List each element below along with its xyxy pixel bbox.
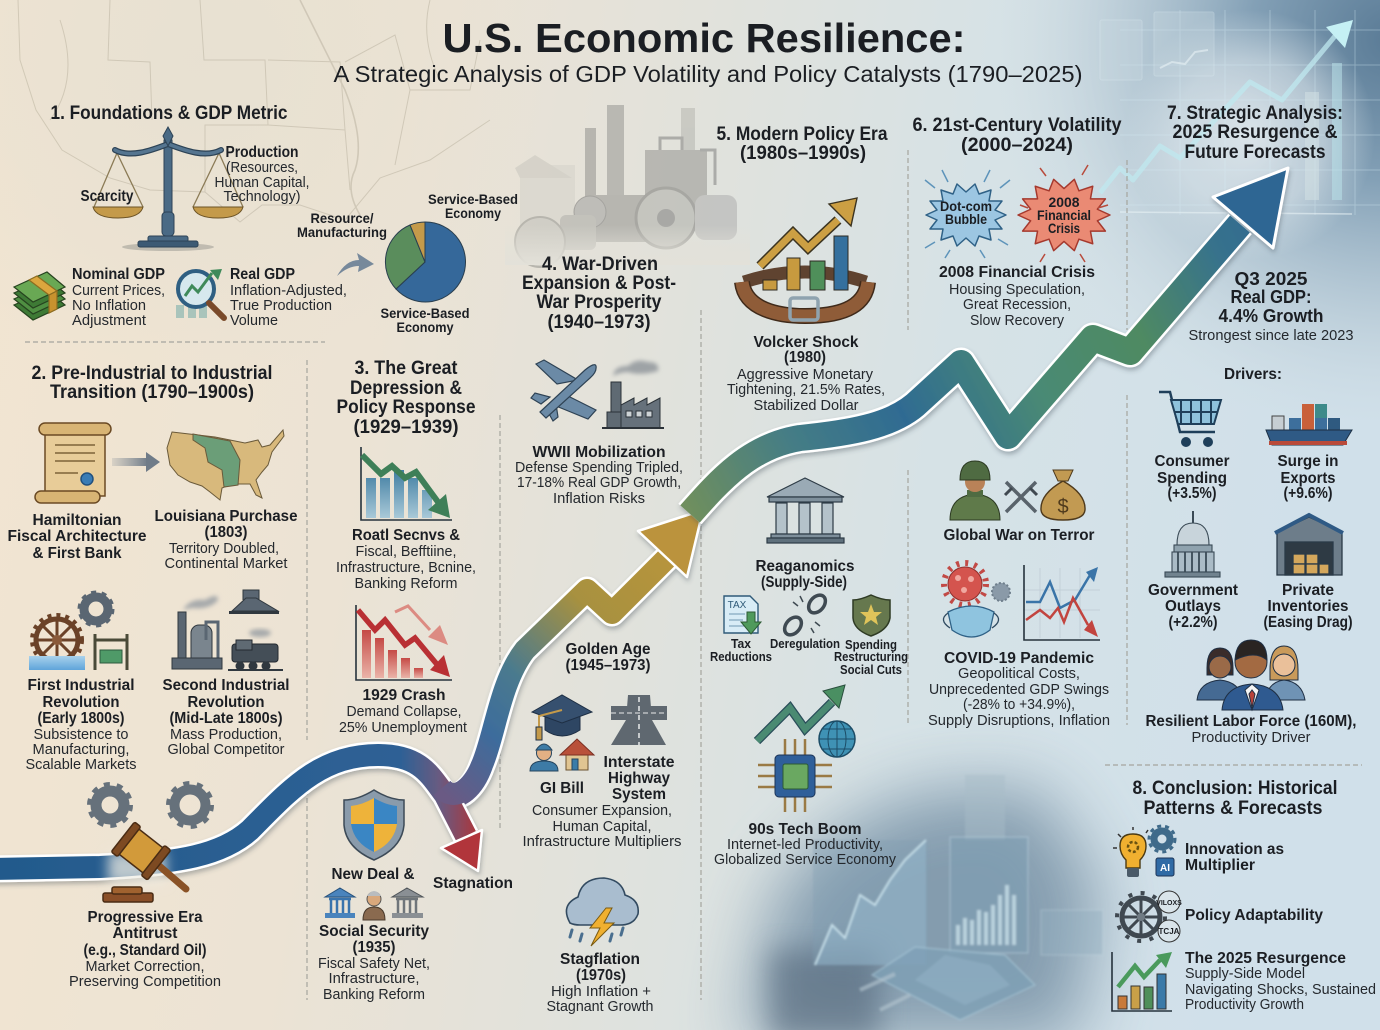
icon: gear right [168,784,212,826]
label: government outlays: (+2.2%) [1168,614,1218,631]
heading [1132,778,1338,819]
text: golden age effects [522,802,682,850]
label: consumer spending [1154,453,1230,502]
label: resilient labor force: Resilient Labor Force (160M), [1146,713,1356,730]
label: production [214,144,310,205]
icon: ship wheel [1117,891,1182,942]
icon: dot-com bubble burst: Bubble [945,212,987,227]
heading: 8. Conclusion: Historical [1132,778,1338,799]
icon: soldier, rifles and money bag: $ [1057,496,1069,518]
panel: 3. the great depression and policy response [318,358,513,1003]
label: interstate highway system: Highway [608,770,670,787]
icon: belt with rising bars [742,198,868,320]
heading: Depression & [350,378,462,399]
label: Reaganomics: Reaganomics [756,558,855,575]
text: golden age effects: Infrastructure Multipliers [522,833,682,850]
label: second industrial revolution: Global Competitor [168,741,285,758]
icon: factory and railroad [172,590,283,671]
heading: 2025 Resurgence & [1172,122,1338,143]
icon: scroll [35,423,111,503]
label: progressive era antitrust: Preserving Competition [69,973,221,990]
label: the 2025 resurgence: Productivity Growth [1185,996,1304,1013]
chart: volatility lines [1023,565,1100,640]
heading [336,358,476,438]
icon: dot-com bubble burst [925,170,1010,258]
chart: economy share pie [385,222,466,302]
label: 2008 financial crisis: Housing Speculation, [949,281,1085,298]
icon: tax document: TAX [728,600,747,611]
icon: magnifier on chart [176,269,224,318]
label: real GDP [230,266,347,329]
label: first industrial revolution: First Industrial [28,677,134,694]
label: second industrial revolution: (Mid-Late 1800s) [170,710,282,727]
heading: 2. Pre-Industrial to Industrial [32,363,272,384]
label: COVID-19 pandemic: COVID-19 Pandemic [944,650,1094,667]
label: stagflation [546,951,654,1015]
label: social security: Fiscal Safety Net, [318,955,430,972]
heading: (1929–1939) [354,417,458,438]
label: Volcker shock: (1980) [784,349,826,366]
labels: reaganomics policies [710,637,908,677]
label: government outlays: Outlays [1165,598,1221,615]
heading: Expansion & Post- [522,273,676,294]
arrow: to pie [337,253,374,276]
label: second industrial revolution: Revolution [188,694,264,711]
label: the 2025 resurgence: Supply-Side Model [1185,965,1305,982]
panel: 2. pre-industrial to industrial transition [8,363,298,990]
icon: military plane [531,360,596,421]
label: production: Human Capital, [214,174,310,191]
callout: Q3 2025 real GDP: Strongest since late 2023 [1188,327,1354,344]
label: social security: Social Security [319,923,429,940]
labels: reaganomics policies: Deregulation [770,637,840,651]
heading: Transition (1790–1900s) [50,382,254,403]
heading: 3. The Great [354,358,458,379]
label: private inventories: Private [1282,582,1334,599]
icon: gear left [90,784,130,826]
label: 2008 financial crisis: Great Recession, [963,296,1071,313]
panel: 5. modern policy era [710,124,908,868]
background: faint US map [18,0,490,222]
label: COVID-19 pandemic: Geopolitical Costs, [958,665,1080,682]
label: Louisiana Purchase [154,508,298,572]
icon: storm cloud [566,878,638,946]
labels: reaganomics policies: Social Cuts [840,663,902,677]
label: consumer spending: (+3.5%) [1168,485,1216,502]
labels: reaganomics policies: Spending [845,638,897,652]
label: production: Production [226,144,298,161]
icon: GI and house [530,739,594,771]
labels: reaganomics policies: Reductions [710,650,772,664]
heading [522,254,676,333]
label: surge in exports: Exports [1280,470,1336,487]
icon: capitol [1165,511,1220,577]
label: interstate highway system: System [612,786,666,803]
label: progressive era antitrust: Antitrust [112,925,178,942]
label: 1929 crash [339,687,468,736]
label: resource and manufacturing [297,210,387,240]
label: 90s tech boom [714,821,896,868]
heading: Policy Response [336,397,476,418]
heading: Patterns & Forecasts [1144,798,1322,819]
background: top-right dashboard [1100,10,1380,215]
label: government outlays: Government [1148,582,1239,599]
label: first industrial revolution: Scalable Markets [26,756,136,773]
panel: 8. conclusion [1112,778,1376,1013]
label: WWII mobilization: Inflation Risks [553,490,645,507]
label: Hamiltonian fiscal architecture: & First Bank [32,545,122,562]
arrow: to Louisiana Purchase [112,452,160,472]
text: golden age effects: Human Capital, [552,818,652,835]
icon: 2008 financial crisis burst: 2008 [1048,195,1080,210]
label: innovation as multiplier: Multiplier [1185,857,1255,874]
label: real GDP: Inflation-Adjusted, [230,282,347,299]
label: real GDP: True Production [230,297,332,314]
heading [716,124,888,164]
label: Hamiltonian fiscal architecture: Hamiltonian [32,512,122,529]
label: first industrial revolution [26,677,136,773]
label: 2008 financial crisis: Slow Recovery [970,312,1064,329]
label: WWII mobilization: Defense Spending Tripled, [515,459,683,476]
callout: Q3 2025 real GDP: Q3 2025 [1234,268,1308,289]
heading: 7. Strategic Analysis: [1167,103,1343,124]
label: second industrial revolution: Second Industrial [162,677,290,694]
icon: innovation bulb: AI [1160,863,1170,874]
icon: water wheel, gear and loom [29,592,127,670]
label: Louisiana Purchase: Continental Market [164,555,288,572]
icon: resurgence chart [1112,952,1172,1011]
label: progressive era antitrust [69,909,221,990]
label: Volcker shock [727,334,885,414]
label: stagnation: Stagnation [433,875,513,892]
growth ribbon: modern era to 2025 [690,168,1288,514]
label: new deal: New Deal & [332,866,415,883]
label: surge in exports [1278,453,1338,502]
heading: 6. 21st-Century Volatility [912,115,1122,136]
label: progressive era antitrust: (e.g., Standard Oil) [84,942,206,959]
label: global war on terror: Global War on Terror [944,527,1094,544]
panel: 7. strategic analysis [1146,103,1356,746]
label: service-based economy bottom [380,305,470,335]
heading: 4. War-Driven [542,254,658,275]
icon: workers [1197,640,1305,710]
label: WWII mobilization [515,444,683,507]
label: Louisiana Purchase: Territory Doubled, [169,540,279,557]
label: 1929 crash: 1929 Crash [362,687,446,704]
label: stagflation: (1970s) [576,967,626,984]
title: U.S. Economic Resilience: [442,15,966,61]
chart: 1929 crash [356,605,452,680]
label: social security: (1935) [352,939,396,956]
icon: shield [344,790,404,860]
label: social security: Banking Reform [323,986,425,1003]
growth ribbon: post-war rise with golden arrow [447,510,703,796]
label: interstate highway system [604,754,675,803]
label: surge in exports: Surge in [1278,453,1338,470]
label: policy adaptability: Policy Adaptability [1185,907,1323,924]
chart: green decline [361,447,452,520]
label: GI Bill: GI Bill [540,780,584,797]
label: second industrial revolution [162,677,290,758]
icon: factory with smoke [602,361,664,429]
icon: shopping cart [1159,392,1221,446]
panel: 6. 21st-century volatility [912,115,1122,729]
label: progressive era antitrust: Progressive Era [88,909,203,926]
label: fiscal measures: Infrastructure, Bcnine, [336,559,476,576]
label: stagflation: Stagflation [560,951,640,968]
label: innovation as multiplier [1185,841,1284,874]
label: first industrial revolution: Revolution [42,694,120,711]
label: private inventories: (Easing Drag) [1264,614,1352,631]
label: 90s tech boom: Internet-led Productivity, [727,836,883,853]
label: consumer spending: Consumer [1154,453,1230,470]
icon: 2008 financial crisis burst: Crisis [1048,221,1080,236]
label: resilient labor force: Productivity Driver [1192,729,1310,746]
heading: 1. Foundations & GDP Metric [50,103,288,124]
label: real GDP: Real GDP [230,266,295,283]
subtitle: A Strategic Analysis of GDP Volatility and Policy Catalysts (1790–2025) [334,61,1082,87]
label: golden age [566,641,651,674]
label: scarcity: Scarcity [80,188,134,205]
label: golden age: (1945–1973) [566,657,650,674]
heading [32,363,272,403]
label: resource and manufacturing: Manufacturing [297,224,387,240]
label: nominal GDP: Nominal GDP [72,266,165,283]
icon: small shield [853,595,890,636]
label: surge in exports: (+9.6%) [1284,485,1332,502]
label: first industrial revolution: Subsistence to [34,726,128,743]
icon: cash stack [14,272,65,320]
callout: Q3 2025 real GDP: 4.4% Growth [1218,305,1324,326]
label: nominal GDP: No Inflation [72,297,146,314]
label: 2008 financial crisis: 2008 Financial Crisis [939,264,1095,281]
label: government outlays [1148,582,1239,631]
heading: War Prosperity [536,292,662,313]
label: service-based economy bottom: Economy [396,319,454,335]
label: 2008 financial crisis [939,264,1095,329]
heading: Future Forecasts [1184,142,1326,163]
label: real GDP: Volume [230,312,278,329]
icon: capitol bank [767,478,844,543]
label: social security [318,923,430,1003]
label: production: (Resources, [226,159,298,176]
heading: (1980s–1990s) [740,143,866,164]
label: WWII mobilization: WWII Mobilization [532,444,666,461]
label: 90s tech boom: Globalized Service Economy [714,851,896,868]
label: Volcker shock: Stabilized Dollar [754,397,858,414]
label: Reaganomics [756,558,855,591]
section dividers [25,150,1362,1000]
label: service-based economy top [428,191,518,221]
icon: 2008 financial crisis burst [1018,165,1110,262]
text: golden age effects: Consumer Expansion, [532,802,672,819]
label: stagflation: High Inflation + [551,983,651,1000]
label: resilient labor force [1146,713,1356,746]
label: golden age: Golden Age [566,641,651,658]
icon: ship wheel: VILOXS [1156,900,1182,907]
ribbon junction [442,765,482,794]
label: COVID-19 pandemic: (-28% to +34.9%), [963,696,1075,713]
label: 1929 crash: 25% Unemployment [339,719,468,736]
labels: reaganomics policies: Tax [731,637,751,651]
label: drivers: Drivers: [1224,366,1282,383]
growth ribbon: early industrial to stagnation [0,755,482,871]
label: service-based economy bottom: Service-Based [380,305,470,321]
panel: 4. war-driven expansion and post-war prosperity [515,254,683,1015]
heading: (1940–1973) [548,312,650,333]
heading [1167,103,1343,163]
label: nominal GDP [72,266,165,329]
ribbon highlight under gavel [108,852,166,884]
label: fiscal measures: Roatl Secnvs & [352,527,460,544]
callout: Q3 2025 real GDP: Real GDP: [1230,286,1312,307]
label: fiscal measures [336,527,476,592]
icon: ship wheel: TCJA [1159,927,1180,936]
icon: tax document [724,596,761,634]
label: 90s tech boom: 90s Tech Boom [748,821,862,838]
label: service-based economy top: Service-Based [428,191,518,207]
icon: dot-com bubble burst: Dot-com [940,199,992,214]
icon: balance scale [93,127,243,251]
label: 1929 crash: Demand Collapse, [346,703,462,720]
label: the 2025 resurgence [1185,950,1376,1013]
label: interstate highway system: Interstate [604,754,675,771]
icon: 2008 financial crisis burst: Financial [1037,208,1091,223]
label: resource and manufacturing: Resource/ [310,210,374,226]
label: social security: Infrastructure, [328,970,420,987]
label: service-based economy top: Economy [445,205,501,221]
label: Louisiana Purchase: Louisiana Purchase [154,508,298,525]
icon: container ship [1266,404,1352,445]
label: nominal GDP: Adjustment [72,312,147,329]
label: COVID-19 pandemic: Unprecedented GDP Swings [929,681,1109,698]
label: private inventories [1264,582,1352,631]
icon: gavel [103,822,186,902]
heading [912,115,1122,156]
icon: warehouse [1275,515,1343,575]
label: private inventories: Inventories [1268,598,1349,615]
label: Volcker shock: Tightening, 21.5% Rates, [727,381,885,398]
icon: innovation bulb [1113,826,1175,877]
label: the 2025 resurgence: Navigating Shocks, Sustained [1185,981,1376,998]
background: bottom tech workstation [745,775,1103,1030]
label: consumer spending: Spending [1157,470,1227,487]
label: progressive era antitrust: Market Correction, [86,958,204,975]
heading: (2000–2024) [961,135,1073,156]
label: innovation as multiplier: Innovation as [1185,841,1284,858]
label: stagflation: Stagnant Growth [546,998,654,1015]
background: steam engine sketch [505,105,750,267]
label: first industrial revolution: (Early 1800s) [38,710,124,727]
label: the 2025 resurgence: The 2025 Resurgence [1185,950,1346,967]
icon: broken chain [781,592,829,638]
icon: tech chip, globe and growth arrow [757,685,855,812]
label: Hamiltonian fiscal architecture [8,512,147,562]
label: nominal GDP: Current Prices, [72,282,165,299]
icon: US map with Louisiana Purchase [167,430,284,500]
icon: graduation cap [532,695,592,740]
label: Hamiltonian fiscal architecture: Fiscal Architecture [8,528,147,545]
heading: 5. Modern Policy Era [716,124,888,145]
panel: 1. foundations and GDP metric [14,103,518,335]
label: Reaganomics: (Supply-Side) [761,574,847,591]
label: Louisiana Purchase: (1803) [204,524,248,541]
label: COVID-19 pandemic: Supply Disruptions, Inflation [928,712,1110,729]
label: fiscal measures: Fiscal, Befftiine, [356,543,456,560]
icon: interstate highway [611,695,667,745]
label: second industrial revolution: Mass Production, [170,726,282,743]
icon: banks and retiree [325,888,423,920]
icon: soldier, rifles and money bag [950,461,1085,520]
icon: virus and mask [943,563,1010,637]
label: fiscal measures: Banking Reform [354,575,458,592]
label: WWII mobilization: 17-18% Real GDP Growth, [517,474,681,491]
labels: reaganomics policies: Restructuring [834,650,908,664]
label: Volcker shock: Volcker Shock [754,334,859,351]
label: Volcker shock: Aggressive Monetary [737,366,873,383]
label: production: Technology) [224,188,300,205]
label: first industrial revolution: Manufacturing, [32,741,130,758]
callout: Q3 2025 real GDP [1188,268,1354,344]
label: COVID-19 pandemic [928,650,1110,729]
